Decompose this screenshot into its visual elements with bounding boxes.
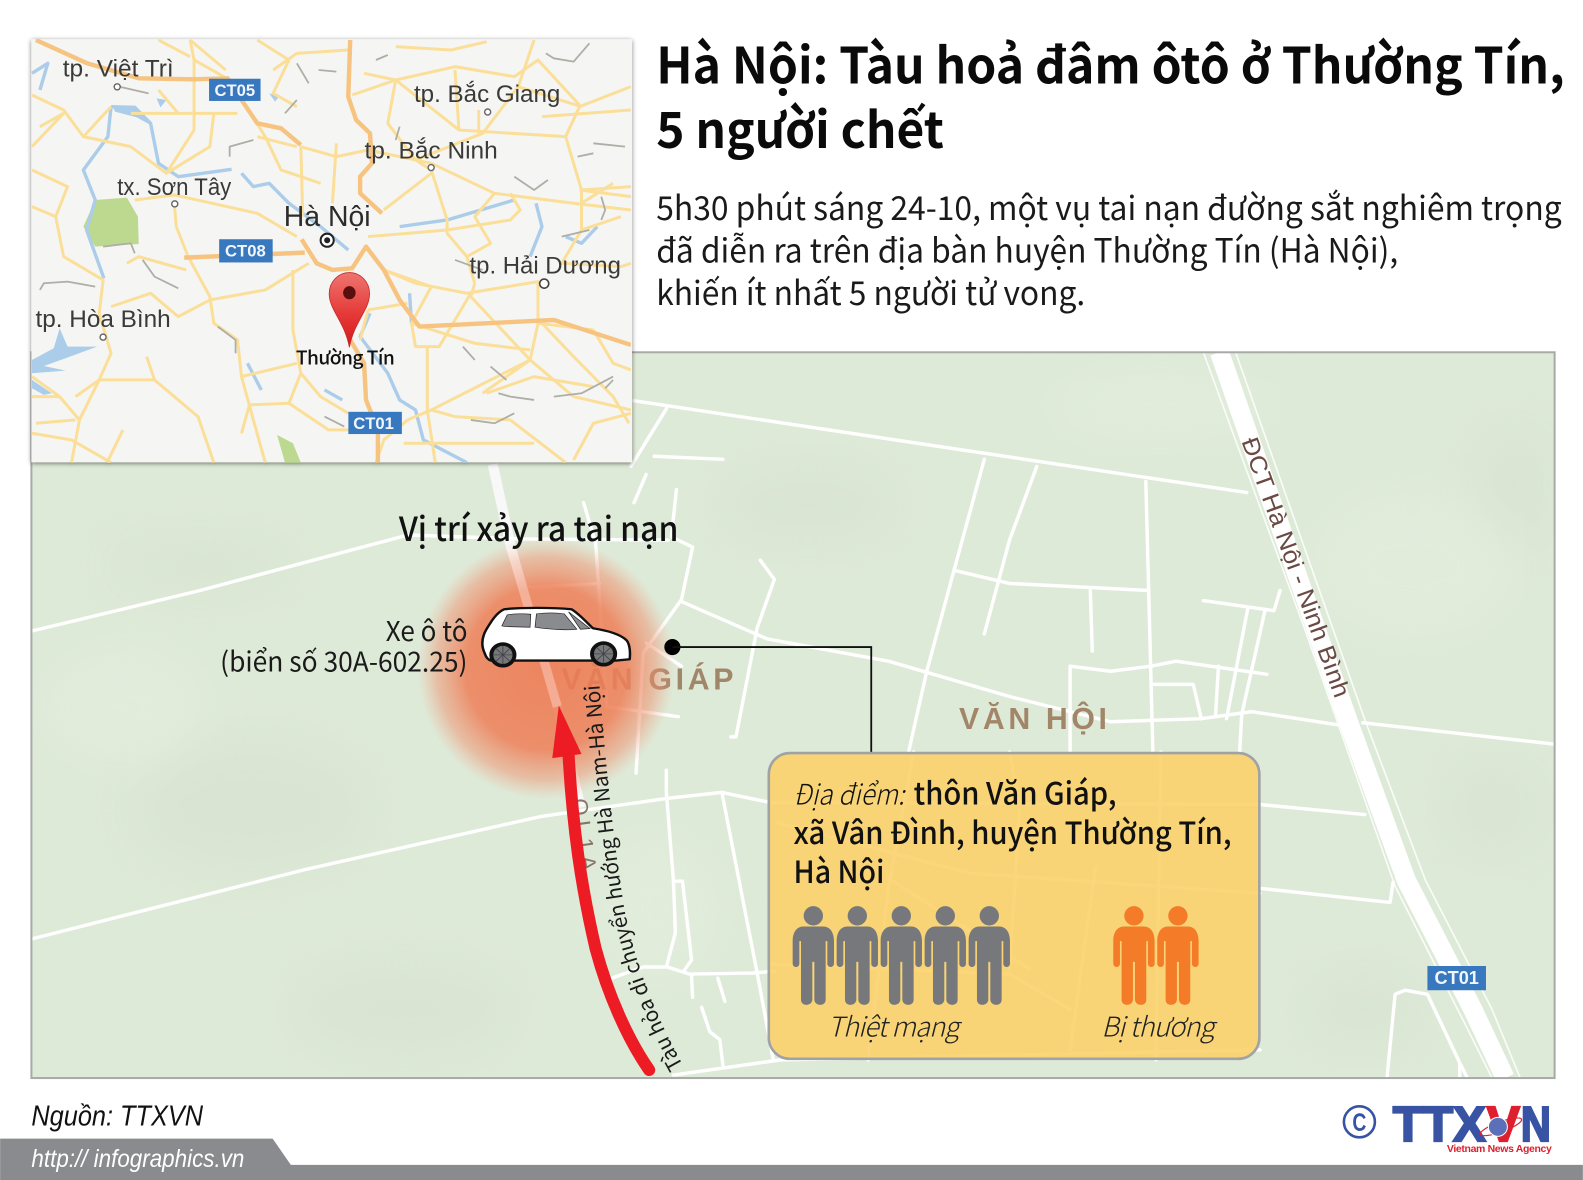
road name: ĐCT Hà Nội - Ninh Bình: ĐCT Hà Nội - Ninh Bình [1236, 434, 1355, 701]
text: location: xã Vân Đình, huyện Thường Tín, [794, 808, 1232, 853]
intro text: đã diễn ra trên địa bàn huyện Thường Tín (Hà Nội), [656, 223, 1398, 272]
road badge: CT05: CT05 [214, 81, 255, 100]
road badge: CT01 inset [348, 412, 402, 434]
panel: locator inset map [31, 39, 632, 463]
road badge: CT01 inset: CT01 [353, 414, 394, 433]
accident location glow [417, 537, 675, 799]
title: 5 người chết [656, 91, 944, 163]
inset labels: tp. Hải Dương [469, 253, 621, 280]
inset labels: tp. Hòa Bình [35, 306, 171, 333]
park [83, 198, 139, 247]
icon: map pin [329, 273, 370, 347]
source: Nguồn: TTXVN [31, 1099, 204, 1131]
website: http:// infographics.vn [31, 1146, 244, 1173]
copyright mark [1344, 1106, 1375, 1137]
logo: TTXVN [1344, 1098, 1552, 1155]
icon: white car [482, 608, 630, 668]
logo: TTXVN: N [1521, 1098, 1551, 1152]
road overlay inside the glow [511, 547, 557, 707]
road badge: CT01 on map: CT01 [1434, 968, 1479, 988]
train direction label: Tàu hỏa di chuyển hướng Hà Nam-Hà Nội [583, 686, 681, 1073]
icons: two people injured [1113, 906, 1199, 1005]
label: car: Xe ô tô [386, 609, 467, 649]
text: location: Địa điểm: [794, 772, 906, 813]
logo: TTXVN: V [1487, 1098, 1520, 1152]
panel: location and casualties [769, 753, 1259, 1059]
rivers [32, 63, 597, 463]
icons: five people killed [793, 906, 1010, 1005]
inset labels [35, 56, 621, 340]
panel: detailed accident map [30, 351, 1556, 1080]
place label: Văn Hội: VĂN HỘI [959, 702, 1110, 736]
logo: TTXVN: Vietnam News Agency [1447, 1144, 1552, 1155]
road badge: CT08: CT08 [225, 241, 266, 260]
heading: accident position: Vị trí xảy ra tai nạn [398, 502, 678, 551]
label: car: (biển số 30A-602.25) [220, 639, 467, 679]
connector from accident point to info panel [664, 639, 871, 754]
copyright mark: C [1352, 1109, 1366, 1137]
label: Thường Tín: Thường Tín [296, 342, 395, 370]
text: location [794, 768, 1232, 892]
text: location: Hà Nội [794, 847, 884, 892]
road badge: CT05 [209, 79, 261, 101]
label: killed: Thiệt mạng [828, 1005, 962, 1045]
intro text: 5h30 phút sáng 24-10, một vụ tai nạn đường sắt nghiêm trọng [656, 181, 1562, 230]
inset labels: tp. Việt Trì [63, 56, 174, 83]
intro text: khiến ít nhất 5 người tử vong. [656, 266, 1085, 315]
road network [32, 352, 1553, 1078]
roads seen through the yellow panel [866, 750, 1262, 1062]
intro text [656, 181, 1562, 315]
inset labels: tp. Bắc Ninh [365, 137, 498, 164]
road label fragment under the arrow: QL1A [566, 797, 601, 872]
text: location: thôn Văn Giáp, [914, 768, 1117, 813]
road badge: CT01 on map [1427, 966, 1486, 990]
highways [36, 40, 631, 463]
title: Hà Nội: Tàu hoả đâm ôtô ở Thường Tín, [656, 26, 1565, 98]
inset labels: tp. Bắc Giang [414, 81, 560, 108]
road badge: CT08 [219, 239, 273, 262]
place label: Vân Giáp: VĂN GIÁP [561, 662, 737, 696]
footer band [0, 1139, 1583, 1180]
secondary grey roads [40, 43, 625, 463]
logo: TTXVN: TTX [1393, 1098, 1486, 1152]
title [656, 26, 1565, 163]
label: car [220, 609, 467, 679]
inset labels: Hà Nội [284, 200, 371, 232]
label: injured: Bị thương [1101, 1005, 1218, 1045]
minor roads [32, 40, 631, 463]
inset labels: tx. Sơn Tây [117, 174, 232, 201]
arrow: train direction [552, 706, 649, 1070]
